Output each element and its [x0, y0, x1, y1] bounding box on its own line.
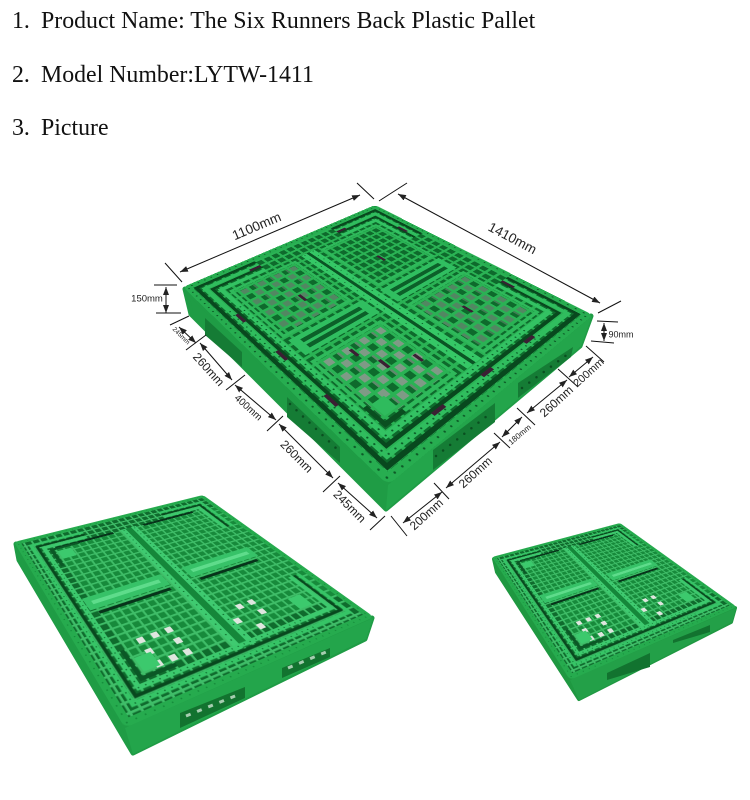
dimension: 1100mm: 1100mm: [230, 209, 283, 243]
heading: model number: Model Number:LYTW-1411: [41, 62, 314, 88]
dimension: 245mm left side: 245mm: [171, 326, 191, 346]
dimension: 260mm right side second: [527, 369, 578, 420]
dimension: 260mm left side second: 260mm: [277, 437, 316, 476]
lower left pallet back view: [14, 496, 374, 756]
dimension: 245mm front: 245mm: [330, 487, 369, 526]
heading: picture: [12, 115, 109, 141]
dimension: 200mm front: 200mm: [407, 496, 446, 533]
heading: picture: Picture: [41, 115, 109, 141]
dimension: 260mm left side second: [277, 424, 340, 492]
dimension: 200mm front: [391, 483, 449, 536]
dimension: 150mm: 150mm: [131, 294, 163, 305]
dimension: 200mm right: 200mm: [571, 356, 607, 390]
dimension: 260mm right side first: [446, 433, 510, 491]
dimension: 1410mm: [379, 183, 621, 313]
dimension: 90mm: 90mm: [608, 329, 634, 339]
right small pallet back view: [492, 523, 738, 702]
dimension: 260mm right side second: 260mm: [537, 383, 576, 420]
dimension: 180mm: 180mm: [507, 422, 533, 447]
dimension: 400mm: [232, 385, 283, 431]
dimension: 1410mm: 1410mm: [486, 219, 539, 257]
dimension: 245mm left side: [170, 316, 206, 350]
heading: model number: 2.: [12, 62, 30, 88]
dimension: 260mm left side first: [190, 343, 245, 390]
dimension: 180mm: [502, 408, 535, 447]
dimension: 260mm left side first: 260mm: [190, 350, 227, 389]
dimension: 150mm: [131, 285, 181, 313]
dimension: 1100mm: [165, 183, 374, 282]
dimension: 90mm: [591, 321, 634, 343]
dimension: 260mm right side first: 260mm: [456, 454, 495, 491]
dimension: 245mm front: [330, 483, 385, 530]
heading: product name: 1.: [12, 8, 30, 34]
dimension: 400mm: 400mm: [232, 393, 264, 423]
heading: picture: 3.: [12, 115, 30, 141]
main pallet with dimensions view: [72, 206, 594, 748]
heading: product name: Product Name: The Six Runners Back Plastic Pallet: [41, 8, 535, 34]
